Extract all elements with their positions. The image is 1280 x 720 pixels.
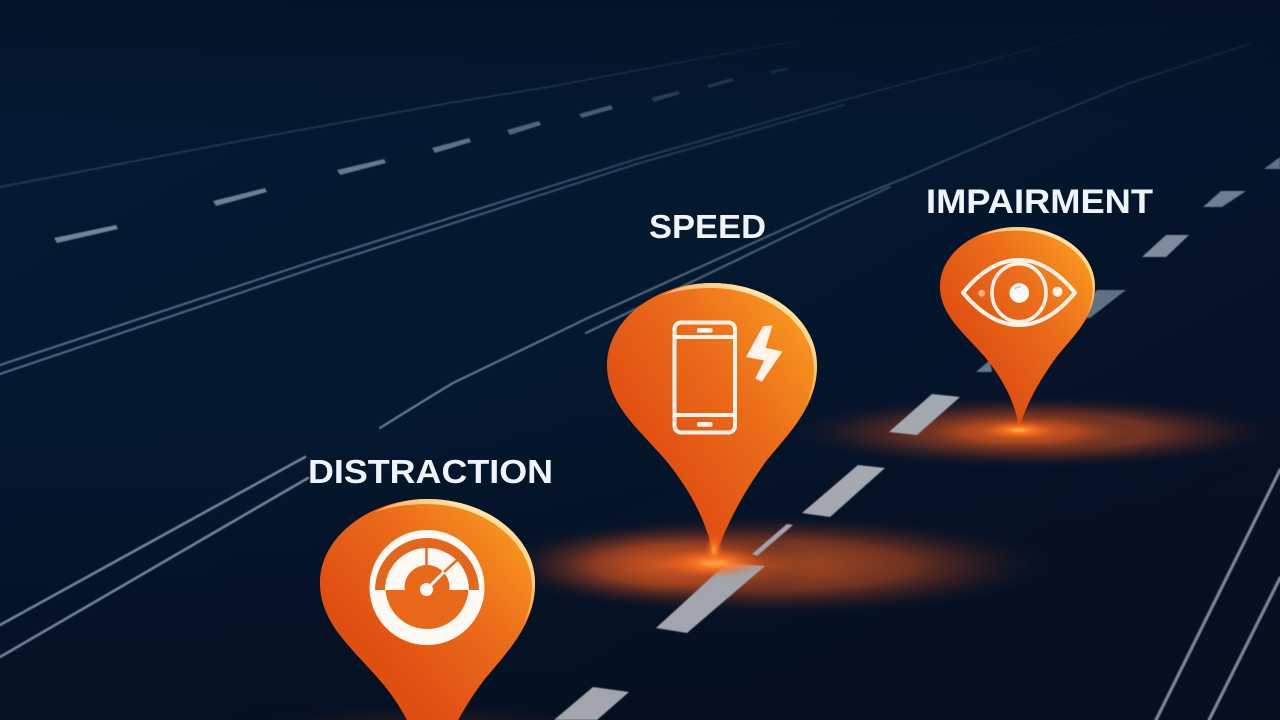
flare: impairment pin tip [981,421,1057,439]
pin body [940,227,1095,428]
icon: lightning bolt [747,326,782,381]
pin body [607,283,817,561]
label: speed: SPEED [649,208,766,245]
icon: speedometer gauge [375,538,479,637]
glow: speed pin base [490,515,1050,615]
pin: speed [607,283,817,561]
label: impairment: IMPAIRMENT [926,183,1153,221]
pin: impairment [940,227,1095,428]
glow: distraction pin base [230,703,630,720]
near lane dashes [554,157,1280,720]
glow: impairment pin base [790,396,1280,468]
far lane dashes [54,67,789,243]
pin body [320,499,535,720]
pin: distraction [320,499,535,720]
flare: speed pin tip [662,532,766,578]
icon: eye [963,260,1075,325]
icon: smartphone [674,322,735,432]
label: distraction: DISTRACTION [308,453,553,490]
